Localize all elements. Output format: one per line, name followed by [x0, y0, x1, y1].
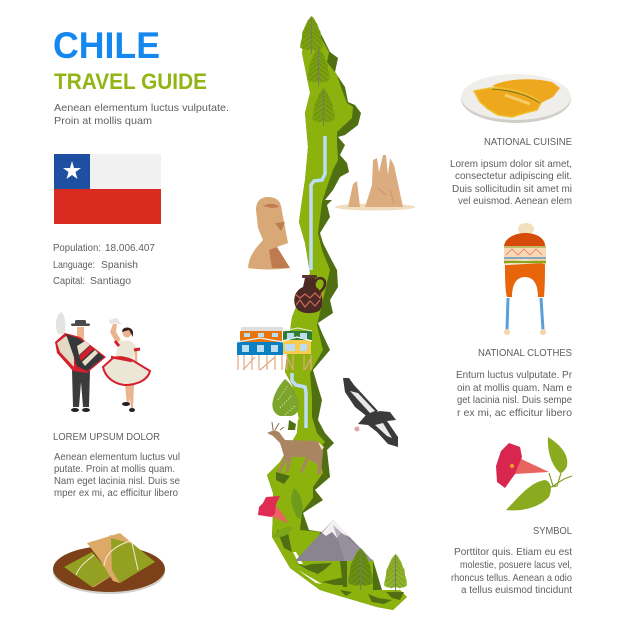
heading: symbol: SYMBOL [533, 525, 572, 537]
illustration: dancers [55, 312, 150, 412]
text: national clothes: r ex mi, ac efficitur libero [457, 407, 572, 419]
text: national cuisine [450, 158, 572, 207]
section text: dancers: putate. Proin at mollis quam. [54, 463, 175, 475]
text: national cuisine: vel euismod. Aenean elem [458, 195, 572, 207]
icon: stilt houses [237, 327, 312, 370]
illustration: moai [248, 197, 290, 270]
text: symbol: rhoncus tellus. Aenean a odio [451, 572, 572, 584]
country facts: 18.006.407 [105, 242, 155, 254]
text: national clothes [456, 369, 572, 419]
section text: dancers [54, 451, 180, 499]
icon: southern trees [348, 548, 407, 592]
flag of Chile [54, 154, 161, 224]
country facts: Capital: [53, 276, 85, 287]
illustration: empanadas on plate [461, 74, 571, 123]
text: national clothes: Entum luctus vulputate. Pr [456, 369, 572, 381]
illustration: condor [343, 378, 398, 447]
icon: copihue flower on map [258, 488, 303, 537]
map: white channels [293, 410, 322, 584]
subtitle: TRAVEL GUIDE [54, 69, 207, 94]
country facts: Spanish [101, 259, 138, 271]
title: CHILE [53, 25, 160, 66]
heading: national cuisine: NATIONAL CUISINE [484, 136, 572, 148]
text: symbol: molestie, posuere lacus vel, [460, 559, 572, 571]
illustration: humitas on plate [53, 533, 165, 594]
map: bright green land [267, 17, 407, 610]
country facts: Population: [53, 243, 101, 254]
section text: dancers: mper ex mi, ac efficitur libero [54, 487, 178, 499]
heading: national clothes: NATIONAL CLOTHES [478, 347, 572, 359]
section text: dancers: Aenean elementum luctus vul [54, 451, 180, 463]
icon: northern trees [300, 16, 335, 126]
text: national clothes: oin at mollis quam. Nam e [457, 382, 572, 394]
country facts [53, 242, 155, 287]
country facts: Santiago [90, 275, 131, 287]
illustration: knitted hat [504, 223, 546, 335]
icon: clay jug [294, 275, 325, 313]
text: symbol: Porttitor quis. Etiam eu est [454, 546, 572, 558]
section heading: dancers: LOREM UPSUM DOLOR [53, 431, 160, 443]
icon: deer [267, 422, 324, 474]
country facts: Language: [53, 260, 95, 271]
intro text [54, 102, 229, 127]
map: dark eastern relief [267, 17, 407, 610]
icon: volcano [295, 520, 373, 561]
text: national cuisine: consectetur adipiscing elit. [455, 170, 572, 182]
text: symbol: a tellus euismod tincidunt [461, 584, 572, 596]
section text: dancers: Nam eget lacinia nisl. Duis se [54, 475, 180, 487]
illustration: rock formations [335, 155, 415, 210]
text: national cuisine: Duis sollicitudin sit amet mi [452, 183, 572, 195]
intro text: Aenean elementum luctus vulputate. [54, 102, 229, 114]
intro text: Proin at mollis quam [54, 115, 152, 127]
text: national clothes: get lacinia nisl. Duis sempe [457, 394, 572, 406]
map: rivers [292, 136, 325, 428]
illustration: copihue flower [496, 437, 572, 510]
woman dancer [103, 318, 150, 412]
text: national cuisine: Lorem ipsum dolor sit amet, [450, 158, 572, 170]
icon: green bush tree [272, 379, 299, 416]
map: southern dark patches [276, 420, 404, 604]
man dancer [55, 312, 106, 412]
illustration: map of Chile [237, 16, 407, 610]
text: symbol [451, 546, 572, 596]
